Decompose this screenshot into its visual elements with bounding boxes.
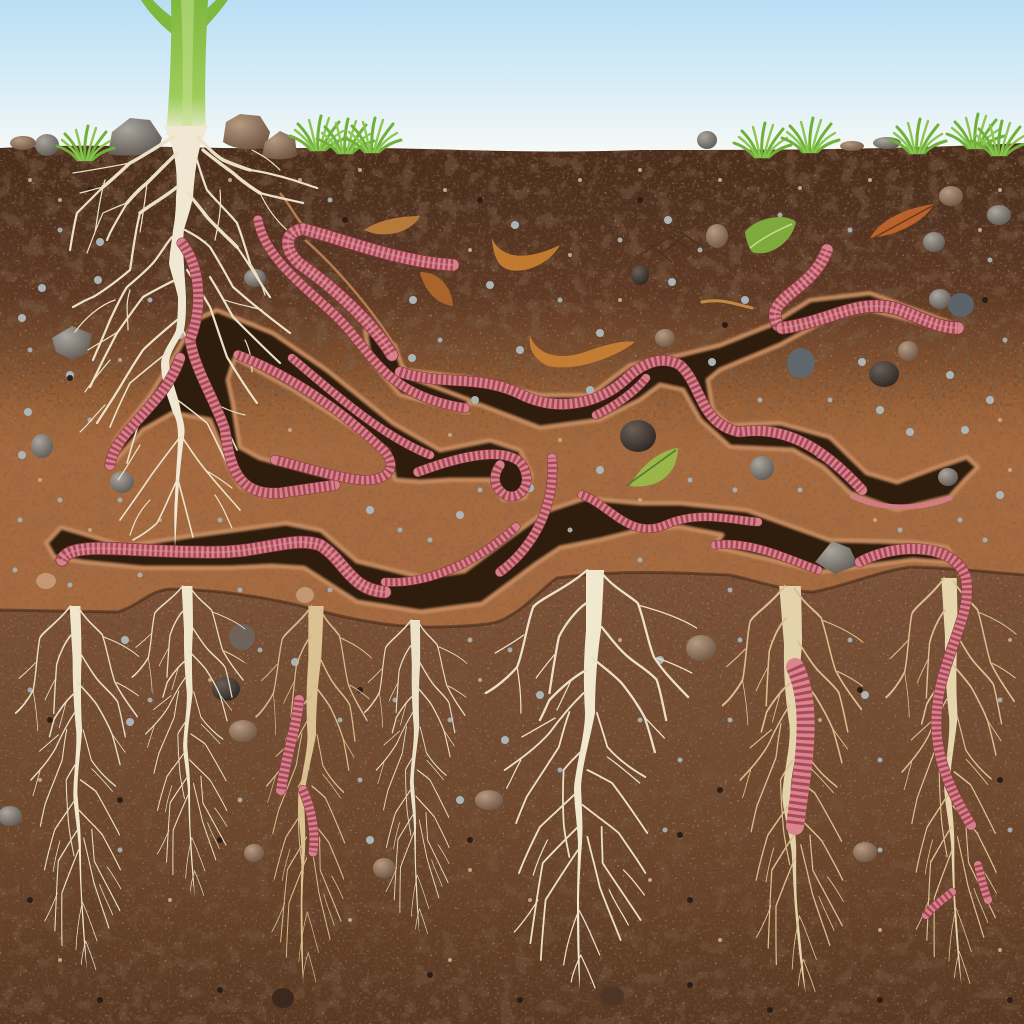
leaf: green top — [745, 217, 796, 253]
worm: on root three upper — [281, 700, 299, 790]
root 5 — [486, 570, 697, 990]
taproot — [161, 126, 208, 550]
worm: lower left long — [62, 542, 385, 592]
twig cluster — [640, 232, 700, 262]
worm: lower centre — [385, 527, 516, 582]
worm: left short — [110, 358, 180, 465]
worm: among main roots — [182, 243, 335, 493]
root 6 — [715, 586, 885, 993]
leaf: green in band — [626, 448, 678, 487]
worm: small bottom right — [926, 892, 952, 915]
burrow edge lines around upper worms — [262, 193, 470, 414]
leaf: long curled — [530, 335, 635, 367]
worm: short central — [596, 378, 646, 415]
plant stem — [141, 0, 228, 135]
worm: right rising — [775, 250, 827, 325]
worm: lower right short — [715, 544, 818, 570]
surface rocks — [10, 114, 901, 159]
worm: rising centre — [500, 458, 552, 572]
worm: upper diagonal — [258, 220, 465, 408]
burrow: lower tunnel — [46, 498, 970, 612]
root 1 — [9, 606, 157, 971]
twig — [702, 301, 752, 308]
burrow network — [46, 193, 978, 612]
worm: tiny bottom right — [978, 865, 988, 900]
worm: right upper — [782, 306, 958, 328]
leaf: orange curled — [492, 238, 560, 271]
worm: hooked — [238, 355, 391, 480]
worm: long central — [400, 361, 862, 490]
clay band lower edge — [0, 567, 1024, 627]
leaf: orange right — [866, 204, 934, 242]
sky — [0, 0, 1024, 152]
burrow: central and right branches — [380, 293, 978, 510]
worm: top curl — [288, 229, 453, 355]
earthworms — [62, 220, 988, 915]
pebbles scattered through soil — [15, 170, 1010, 1010]
burrow: upper narrow gap — [365, 330, 470, 412]
lower roots — [9, 570, 1024, 993]
root 4 — [361, 620, 478, 935]
leaf: tan top — [364, 216, 420, 234]
leaf: brown — [420, 272, 453, 306]
upper soil texture — [0, 140, 1024, 640]
main plant root system — [70, 126, 317, 550]
main root branches — [70, 137, 317, 540]
lower soil layer — [0, 560, 1024, 1024]
burrow: left chamber — [110, 310, 532, 500]
worm: long descending right — [860, 549, 971, 825]
worm: right burrow tail — [852, 496, 950, 507]
root 2 — [127, 586, 259, 897]
worm: curled centre — [418, 454, 527, 496]
worm: on root three lower — [303, 790, 314, 852]
worm: lower wavy — [582, 495, 758, 529]
worm: thick on root six — [795, 667, 806, 826]
root 7 — [880, 578, 1024, 985]
upper soil and clay band — [0, 140, 1024, 660]
stones in soil — [0, 186, 1011, 1008]
grass tufts — [57, 114, 1024, 160]
fallen leaves — [364, 204, 934, 487]
worm: thin diagonal — [292, 358, 430, 455]
root 3 — [256, 606, 372, 984]
